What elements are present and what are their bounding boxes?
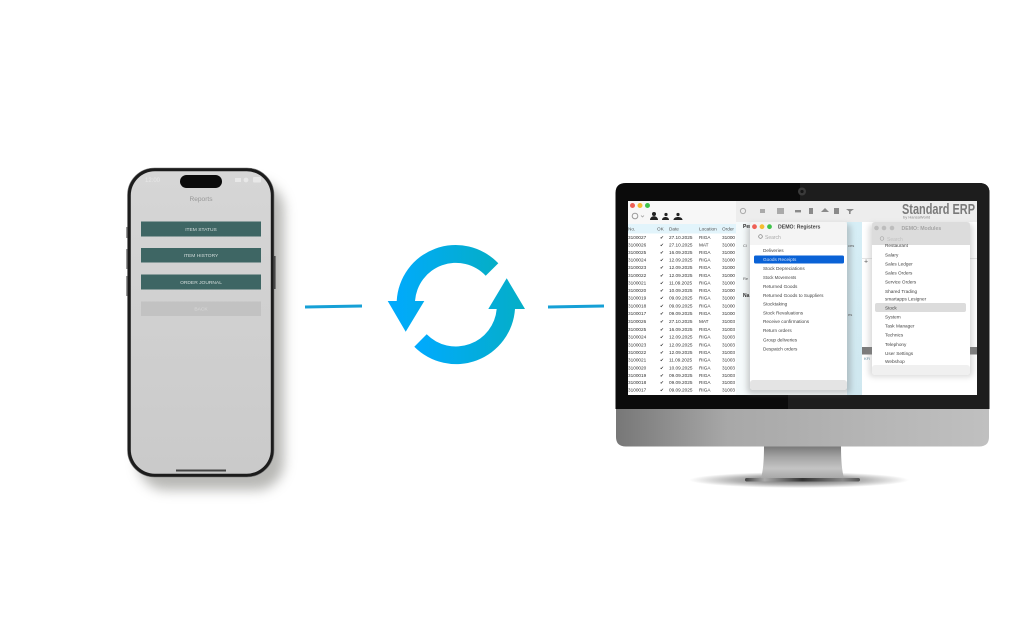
register list: Despatch orders: [763, 346, 798, 352]
module list: Task Manager: [885, 324, 915, 328]
table rows: 31000: [722, 242, 735, 248]
table rows: RIGA: [699, 358, 711, 362]
table rows: ✔: [660, 342, 664, 348]
register list: Returned Goods to Suppliers: [763, 293, 824, 298]
table rows: 31000: [722, 273, 735, 278]
window title and search: DEMO: Modules: [902, 226, 941, 232]
dynamic island: [180, 175, 222, 188]
table rows: RIGA: [699, 265, 711, 270]
table rows: 27.10.2025: [669, 319, 693, 324]
table rows: ✔: [660, 358, 664, 362]
table rows: ✔: [660, 311, 664, 316]
camera: [798, 188, 806, 196]
background pane: [736, 222, 977, 395]
monitor base shadow: [689, 472, 909, 488]
arrow: lower arc pointing up: [414, 278, 525, 364]
table rows: 31000: [722, 296, 735, 300]
table rows: 31000: [722, 280, 735, 286]
table rows: 3100023: [628, 342, 647, 348]
module list: smartapps Lesigner: [885, 296, 927, 302]
table rows: 3100024: [628, 258, 647, 262]
phone body: [128, 168, 274, 477]
table rows: 3100021: [628, 358, 647, 362]
table rows: 31003: [722, 350, 735, 355]
table rows: 11.09.2025: [669, 280, 693, 286]
table header: [628, 224, 736, 234]
table rows: ✔: [660, 235, 664, 240]
arrow: upper arc pointing down: [388, 245, 498, 332]
button: order journal: [141, 274, 261, 290]
module list: Sales Ledger: [885, 262, 913, 266]
window controls: [630, 203, 650, 208]
register list: Group deliveries: [763, 338, 798, 342]
module list: System: [885, 314, 901, 320]
table rows: RIGA: [699, 380, 711, 385]
register list: Stock Movements: [763, 275, 796, 280]
table rows: 27.10.2025: [669, 235, 693, 240]
status bar time: 12:00: [145, 178, 161, 184]
monitor foot: [745, 478, 860, 482]
table rows: 3100020: [628, 366, 647, 370]
module list: Shared Trading: [885, 289, 917, 294]
table rows: RIGA: [699, 250, 711, 255]
table rows: 10.09.2025: [669, 366, 693, 370]
screen title: Reports: [189, 196, 213, 203]
table rows: 31000: [722, 304, 735, 308]
table rows: 31003: [722, 319, 735, 324]
button: item history: ITEM HISTORY: [184, 253, 219, 259]
table rows: 09.09.2025: [669, 296, 693, 300]
module list: Salary: [885, 252, 899, 258]
table rows: ✔: [660, 280, 664, 286]
table rows: 3100023: [628, 265, 647, 270]
register list: Goods Receipts: [763, 257, 797, 262]
table rows: RIGA: [699, 258, 711, 262]
button: order journal: ORDER JOURNAL: [180, 280, 222, 286]
table window: [628, 201, 736, 395]
table rows: ✔: [660, 350, 664, 355]
table rows: 3100027: [628, 235, 647, 240]
table rows: 12.09.2025: [669, 342, 693, 348]
table rows: 31003: [722, 380, 735, 385]
table rows: 3100021: [628, 280, 647, 286]
register list: Stocktaking: [763, 302, 788, 306]
table rows: 12.09.2025: [669, 334, 693, 340]
table rows: 3100025: [628, 327, 647, 332]
table rows: RIGA: [699, 235, 711, 240]
table rows: RIGA: [699, 304, 711, 308]
table rows: 31003: [722, 358, 735, 362]
background pane: ces: [848, 243, 854, 248]
background pane: Na: [743, 293, 750, 299]
window controls: [874, 226, 894, 230]
window title and search: [880, 226, 941, 243]
table rows: 3100018: [628, 304, 647, 308]
selected row: [754, 256, 844, 264]
table rows: 09.09.2025: [669, 311, 693, 316]
table rows: MAT: [699, 319, 709, 324]
smartphone: [126, 168, 284, 490]
modules window: [869, 222, 973, 377]
table rows: ✔: [660, 296, 664, 300]
register list: Stock Depreciations: [763, 266, 805, 271]
table rows: 09.09.2025: [669, 388, 693, 392]
table window: Date: [669, 226, 679, 232]
background pane: KFI: [864, 356, 870, 361]
table rows: 3100026: [628, 319, 647, 324]
table rows: RIGA: [699, 388, 711, 392]
registers window: [747, 222, 851, 394]
bezel reflection: [788, 395, 977, 409]
table rows: 31003: [722, 366, 735, 370]
module list: Sales Orders: [885, 270, 913, 276]
button: item status: ITEM STATUS: [185, 227, 218, 233]
window title and search: Search: [765, 235, 781, 241]
table rows: 31003: [722, 388, 735, 392]
table rows: 3100019: [628, 373, 647, 378]
table rows: RIGA: [699, 280, 711, 286]
sync arrows icon: [388, 245, 525, 364]
table rows: 31000: [722, 311, 735, 316]
module list: [885, 243, 927, 364]
table rows: ✔: [660, 334, 664, 340]
table rows: 3100022: [628, 350, 647, 355]
register list: Return orders: [763, 328, 792, 333]
table rows: 12.09.2025: [669, 265, 693, 270]
phone shadow: [138, 182, 284, 490]
module list: Technics: [885, 332, 904, 338]
table rows: 09.09.2025: [669, 373, 693, 378]
table rows: 3100025: [628, 250, 647, 255]
table rows: RIGA: [699, 327, 711, 332]
table rows: 27.10.2025: [669, 242, 693, 248]
table rows: RIGA: [699, 342, 711, 348]
table rows: ✔: [660, 265, 664, 270]
table rows: 3100022: [628, 273, 647, 278]
connector line: left: [305, 306, 362, 307]
window controls: [752, 224, 772, 229]
table rows: 09.09.2025: [669, 304, 693, 308]
erp toolbar: [736, 201, 977, 222]
module list: Restaurant: [885, 243, 909, 248]
desktop monitor: [616, 183, 990, 488]
table rows: ✔: [660, 250, 664, 255]
home indicator: [176, 470, 226, 472]
connector line: right: [548, 306, 604, 307]
background pane: Re: [743, 276, 749, 281]
window title and search: [759, 224, 820, 241]
module list: Telephony: [885, 342, 907, 347]
table rows: 11.09.2025: [669, 358, 693, 362]
table rows: ✔: [660, 242, 664, 248]
table rows: ✔: [660, 258, 664, 262]
monitor bezel: [616, 183, 990, 409]
table rows: RIGA: [699, 296, 711, 300]
table rows: ✔: [660, 373, 664, 378]
table rows: ✔: [660, 380, 664, 385]
table rows: 16.09.2025: [669, 327, 693, 332]
table window: OK: [657, 226, 665, 232]
table rows: RIGA: [699, 334, 711, 340]
erp logo: by HansaWorld: [903, 214, 930, 220]
erp logo: Standard ERP: [902, 202, 975, 218]
table rows: ✔: [660, 388, 664, 392]
table rows: ✔: [660, 304, 664, 308]
toolbar icons: [632, 212, 682, 220]
table rows: 31000: [722, 258, 735, 262]
screen: [628, 201, 977, 395]
table rows: 31003: [722, 334, 735, 340]
table rows: ✔: [660, 327, 664, 332]
table rows: RIGA: [699, 373, 711, 378]
table rows: ✔: [660, 319, 664, 324]
module list: User Settings: [885, 351, 914, 356]
table rows: 12.09.2025: [669, 350, 693, 355]
table rows: RIGA: [699, 366, 711, 370]
table rows: RIGA: [699, 288, 711, 293]
register list: Deliveries: [763, 248, 784, 253]
table rows: ✔: [660, 288, 664, 293]
table rows: 12.09.2025: [669, 273, 693, 278]
table rows: 31000: [722, 235, 735, 240]
button: item status: [141, 222, 261, 236]
table rows: MAT: [699, 242, 709, 248]
table rows: RIGA: [699, 311, 711, 316]
window title and search: DEMO: Registers: [778, 224, 820, 230]
table rows: RIGA: [699, 273, 711, 278]
table rows: 09.09.2025: [669, 380, 693, 385]
table rows: 31000: [722, 288, 735, 293]
module list: Stock: [885, 306, 897, 310]
table rows: 3100017: [628, 311, 647, 316]
table rows: 16.09.2025: [669, 250, 693, 255]
background pane: Cl: [743, 243, 747, 248]
table rows: 31000: [722, 265, 735, 270]
phone screen: [131, 171, 271, 474]
table rows: ✔: [660, 273, 664, 278]
table rows: [628, 235, 735, 392]
register list: Receive confirmations: [763, 319, 810, 324]
table rows: 10.09.2025: [669, 288, 693, 293]
button: item history: [141, 248, 261, 262]
table rows: 31003: [722, 342, 735, 348]
table window: Location: [699, 226, 717, 232]
table rows: 3100020: [628, 288, 647, 293]
table rows: 3100019: [628, 296, 647, 300]
register list: [763, 248, 824, 352]
monitor chin: [616, 405, 989, 446]
background pane: +: [864, 258, 868, 266]
table rows: RIGA: [699, 350, 711, 355]
button: back: [141, 302, 261, 316]
table rows: 3100024: [628, 334, 647, 340]
register list: Stock Revaluations: [763, 310, 804, 316]
table rows: 31003: [722, 373, 735, 378]
table rows: 31000: [722, 250, 735, 255]
selected row: [875, 303, 966, 312]
table rows: 3100018: [628, 380, 647, 385]
window title and search: Search: [887, 237, 903, 243]
phone side buttons: [126, 227, 276, 296]
monitor stand: [761, 446, 844, 478]
table window: Order: [722, 226, 734, 232]
module list: Service Orders: [885, 280, 917, 284]
table rows: 31003: [722, 327, 735, 332]
module list: Webshop: [885, 359, 905, 364]
table window: No.: [628, 226, 635, 232]
background pane: Per: [743, 224, 751, 230]
background pane: es: [848, 312, 852, 317]
button: back: BACK: [194, 306, 208, 312]
table rows: 3100017: [628, 388, 647, 392]
register list: Returned Goods: [763, 284, 798, 289]
table rows: 12.09.2025: [669, 258, 693, 262]
status bar icons: [235, 177, 261, 182]
table rows: 3100026: [628, 242, 647, 248]
table rows: ✔: [660, 366, 664, 370]
